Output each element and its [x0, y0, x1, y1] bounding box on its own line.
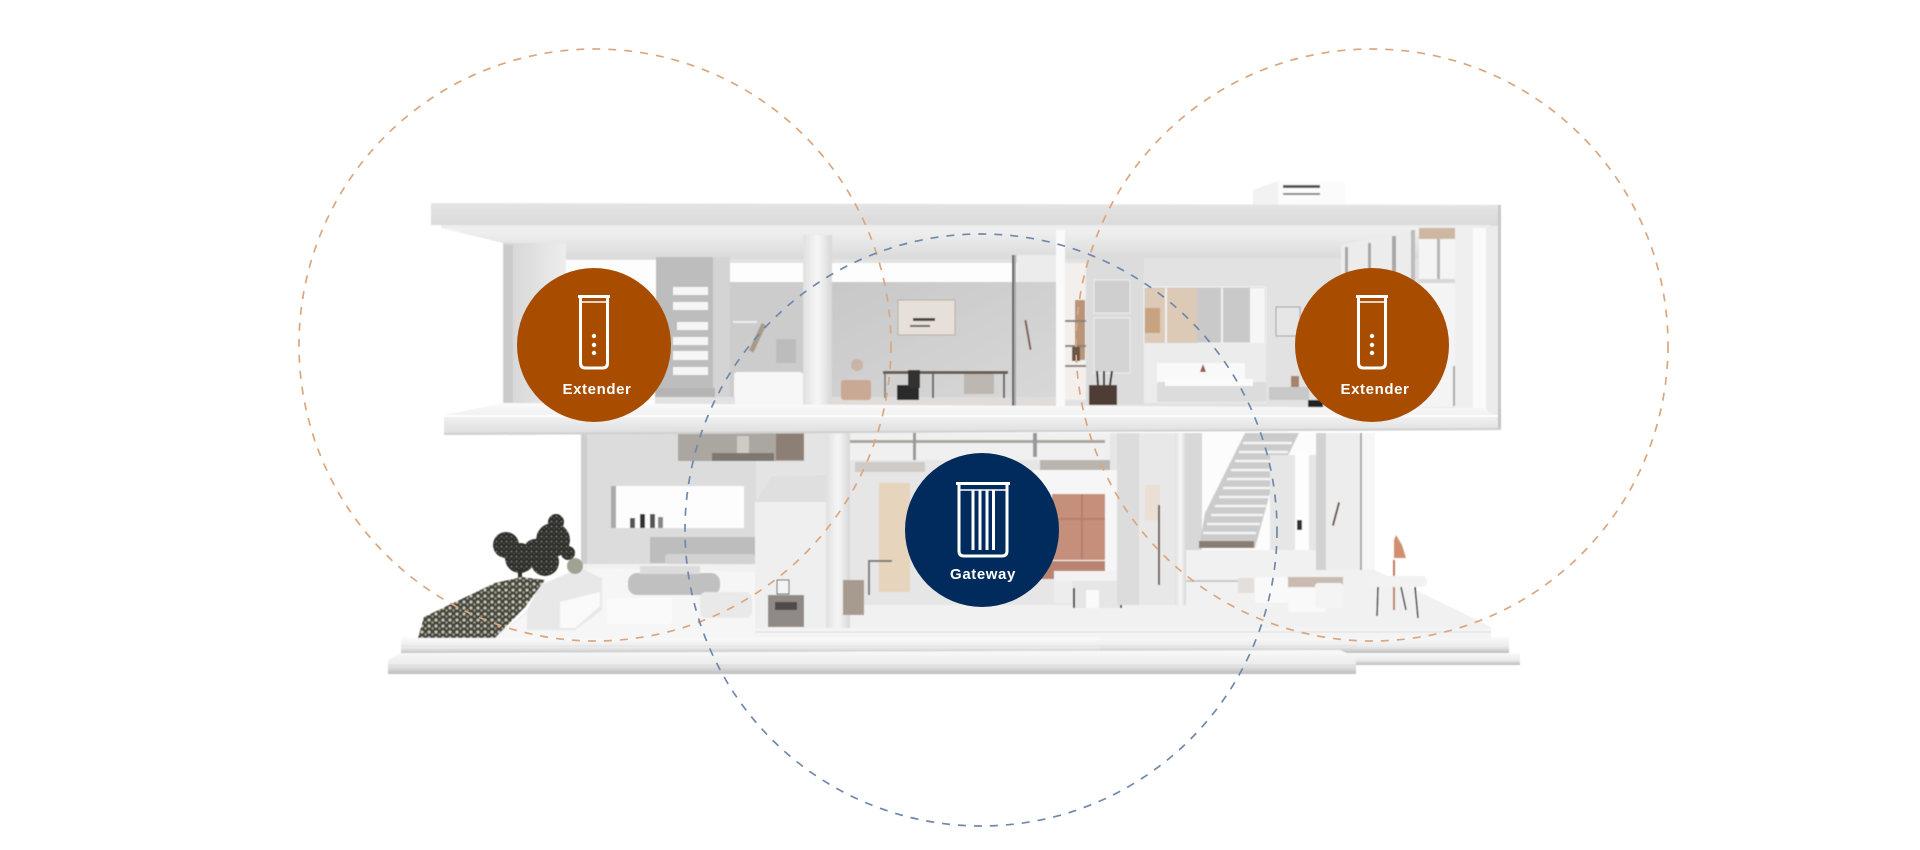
house model [388, 181, 1520, 674]
plant box [1089, 371, 1117, 405]
shelf console [843, 560, 892, 615]
upper floor slab [444, 403, 1501, 435]
right column [1316, 433, 1375, 570]
bedroom wall and panels [1086, 258, 1144, 404]
stair void [1202, 433, 1320, 558]
armchair [700, 592, 752, 618]
roof slab [431, 203, 1501, 430]
floor [495, 563, 1491, 640]
fireplace block [755, 475, 826, 628]
framed art [898, 300, 955, 335]
white sofa [527, 568, 602, 630]
icon: extender device [578, 296, 610, 368]
left room [503, 243, 566, 405]
roof unit [1253, 181, 1345, 206]
living room wall [581, 433, 756, 564]
white coffee table [607, 598, 672, 624]
desk and chair [841, 359, 1008, 400]
floor lamp and side table [1368, 535, 1427, 618]
nightstand and frame [1269, 307, 1323, 408]
stair side wall [1270, 455, 1316, 570]
wood door [879, 483, 910, 592]
coverage ring: left extender [299, 49, 891, 641]
bedroom window [1144, 287, 1266, 343]
icon: extender device [1356, 296, 1388, 368]
window with bottles [611, 486, 744, 528]
kitchen cabinet [1030, 470, 1126, 579]
garden hedge [418, 577, 545, 638]
badge: left extender [517, 268, 671, 422]
rug [495, 568, 755, 638]
central partition walls [803, 235, 832, 409]
coverage ring: right extender [1076, 49, 1668, 641]
right windows [1341, 228, 1486, 408]
column [826, 433, 850, 630]
label: Extender: Extender [1340, 381, 1410, 398]
base steps [388, 628, 1520, 674]
upper floor interior [441, 225, 1486, 410]
badge: gateway [905, 453, 1059, 607]
staircase [1199, 433, 1299, 548]
kitchen zone wall [850, 433, 1117, 605]
high opening [678, 433, 804, 461]
bed [1144, 343, 1266, 403]
gray sofa [628, 537, 755, 595]
coverage ring: gateway [685, 234, 1277, 826]
badge: right extender [1295, 268, 1449, 422]
middle room [832, 263, 1060, 282]
label: Extender: Extender [562, 381, 632, 398]
lounge furniture [1238, 577, 1343, 612]
bookshelf [1065, 263, 1086, 400]
icon: gateway device [956, 484, 1010, 556]
white daybed [734, 372, 803, 408]
wall and mirror [1117, 433, 1202, 605]
garden tree [493, 514, 583, 595]
hall floor strip [1186, 550, 1316, 578]
label: Gateway: Gateway [950, 566, 1016, 583]
lower floor [495, 433, 1491, 640]
dining island [1054, 571, 1128, 608]
